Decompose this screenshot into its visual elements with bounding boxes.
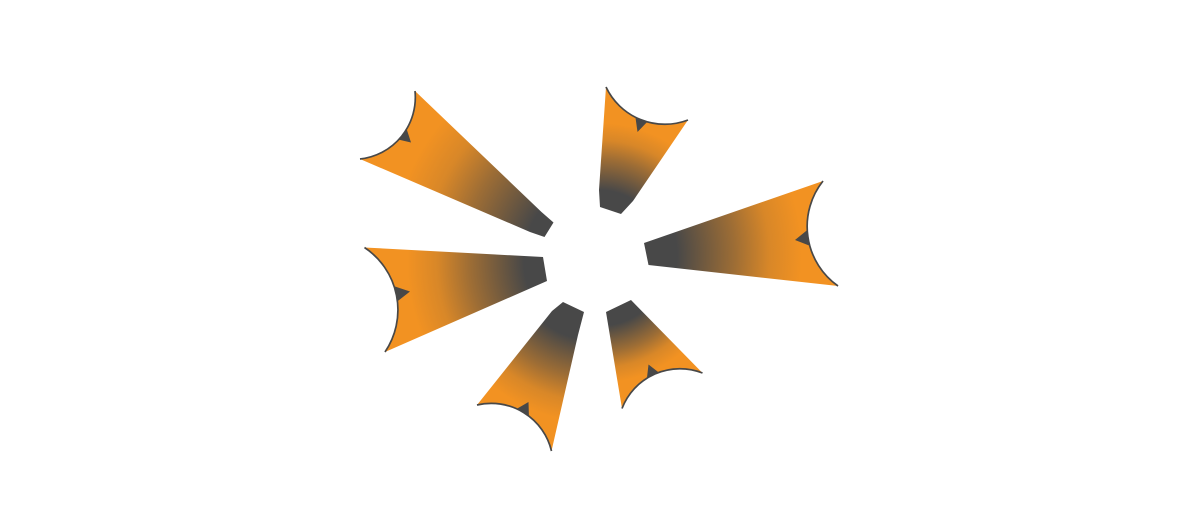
wedge: top left [360, 91, 554, 237]
wedge: top [599, 87, 688, 214]
wedge: left [364, 248, 547, 352]
wedge: bottom [477, 302, 584, 451]
radial burst diagram [360, 86, 838, 452]
wedge: bottom right [606, 300, 702, 408]
wedge: right [644, 181, 838, 286]
